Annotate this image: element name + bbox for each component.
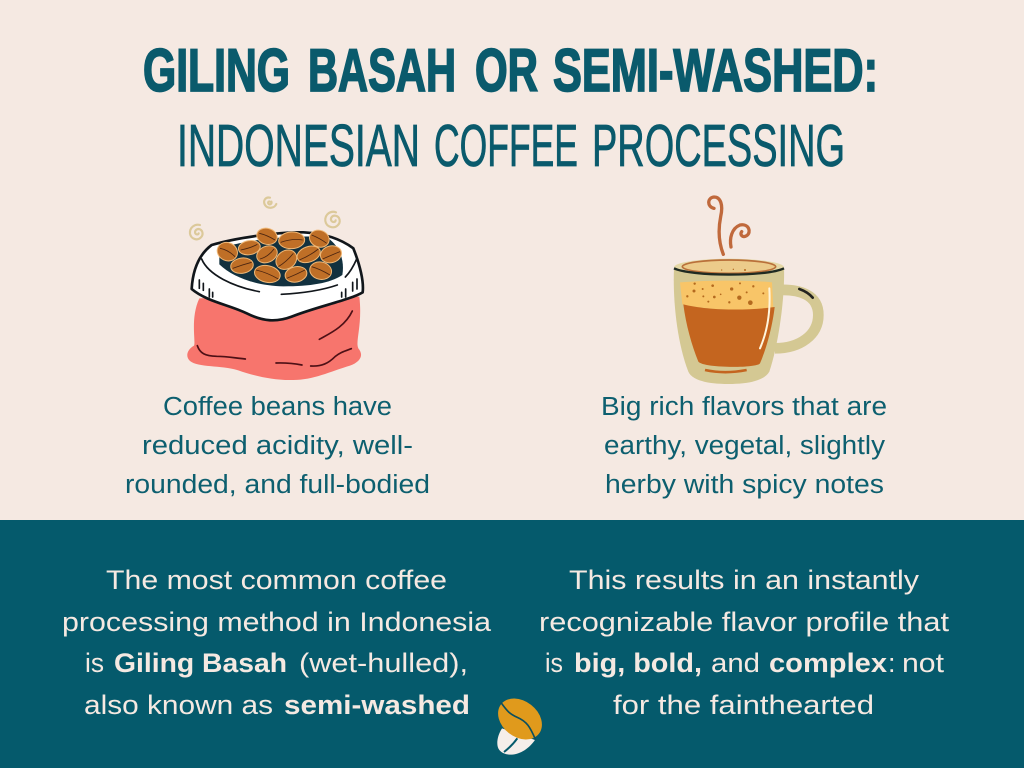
sack inner lines [199,259,357,297]
text: beans description [125,393,430,499]
text: flavor profile: for the fainthearted [613,690,874,720]
text: flavor profile: and [711,648,760,678]
text: flavor profile: not [902,648,945,678]
text: flavor description: herby with spicy notes [605,471,884,499]
text: flavor profile: This results in an instantly [569,565,920,595]
text: flavor profile: complex [769,648,887,678]
text: flavor description [601,393,887,499]
title [143,37,878,179]
title line 1 [143,37,878,104]
title line 2 [177,113,845,179]
text: flavor profile: recognizable flavor profile that [539,607,950,637]
steam swirls [190,198,340,239]
text: beans description: reduced acidity, well- [142,432,413,460]
coffee [683,304,775,367]
text: processing method: The most common coffee [106,565,447,595]
bean creases [220,233,340,279]
beans [214,226,343,285]
title line 2: PROCESSING [592,113,845,179]
text: beans description: rounded, and full-bodied [125,471,430,499]
text: beans description: Coffee beans have [163,393,392,421]
sack fold lines [197,311,352,366]
foam [680,281,773,310]
icon: logo bean [490,690,550,755]
text: processing method: processing method in Indonesia [62,607,492,637]
title line 1: GILING [143,37,290,104]
icon: sack of coffee beans [187,198,363,380]
text: processing method: semi-washed [284,690,470,720]
text: flavor profile: : [888,648,896,678]
title line 1: OR [475,37,538,104]
title line 1: BASAH [308,37,456,104]
text: flavor description: earthy, vegetal, slightly [604,432,885,460]
text: processing method: (wet-hulled), [299,648,468,678]
rim ellipse [674,259,784,276]
text: processing method: Giling Basah [114,648,287,678]
foam bubbles [686,269,764,305]
glass shine [760,288,770,348]
title line 2: INDONESIAN [177,113,420,179]
text: processing method [62,565,492,720]
white sack rim [192,232,363,320]
text: flavor description: Big rich flavors that are [601,393,887,421]
red sack body [187,295,361,380]
bottom highlight [705,370,747,372]
glass [674,268,784,384]
handle [775,290,818,348]
dark interior [219,237,343,286]
steam [709,197,749,254]
text: processing method: also known as [84,690,273,720]
text: flavor profile [539,565,950,720]
bottom panel [0,520,1024,768]
icon: coffee cup [674,197,818,384]
title line 2: COFFEE [434,113,578,179]
text: processing method: is [85,648,104,678]
text: flavor profile: big, bold, [574,648,702,678]
text: flavor profile: is [545,648,563,678]
title line 1: SEMI-WASHED: [553,37,878,104]
